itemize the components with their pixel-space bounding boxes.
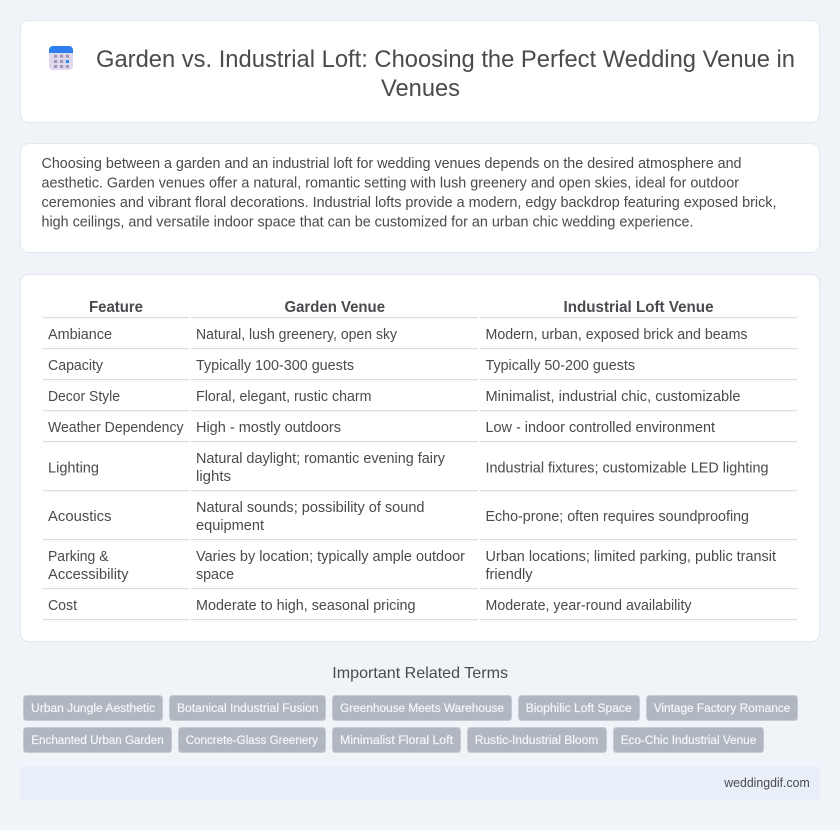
intro paragraph: high ceilings, and versatile indoor space that can be customized for an urban chic wedding experience.: [42, 214, 694, 230]
icon: calendar: [49, 46, 73, 70]
tag: botanical industrial fusion: Botanical Industrial Fusion: [177, 701, 319, 715]
tag: greenhouse meets warehouse: [332, 696, 512, 720]
intro paragraph: ceremonies and vibrant floral decorations. Industrial lofts provide a modern, edgy backdrop featuring exposed brick,: [42, 195, 776, 211]
footer: [20, 766, 820, 800]
row: decor style: Minimalist, industrial chic, customizable: [486, 389, 740, 405]
row: capacity: [43, 358, 797, 380]
table header row: Industrial Loft Venue: [564, 299, 714, 316]
tag: botanical industrial fusion: [170, 696, 326, 720]
row: lighting: [43, 451, 797, 491]
row: lighting: Industrial fixtures; customizable LED lighting: [486, 460, 768, 476]
tag: concrete-glass greenery: [178, 728, 326, 752]
row: parking and accessibility: Urban locations; limited parking, public transit: [486, 549, 776, 565]
row: parking and accessibility: space: [196, 567, 234, 583]
tag: rustic-industrial bloom: Rustic-Industrial Bloom: [475, 733, 598, 747]
intro paragraph: [42, 156, 776, 230]
tag: eco-chic industrial venue: [614, 728, 764, 752]
tag: minimalist floral loft: [332, 728, 460, 752]
row: lighting: Natural daylight; romantic evening fairy: [196, 451, 446, 467]
row: weather dependency: High - mostly outdoors: [196, 420, 341, 436]
row: parking and accessibility: friendly: [486, 567, 533, 583]
row: cost: Moderate, year-round availability: [486, 598, 692, 614]
tag: urban jungle aesthetic: [24, 696, 162, 720]
row: acoustics: equipment: [196, 518, 264, 534]
row: cost: Moderate to high, seasonal pricing: [196, 598, 416, 614]
tag: enchanted urban garden: Enchanted Urban Garden: [31, 733, 164, 747]
row: decor style: [43, 389, 797, 411]
row: acoustics: [43, 500, 797, 540]
row: capacity: Capacity: [48, 358, 104, 374]
row: parking and accessibility: Parking &: [48, 549, 109, 565]
panel: header: [20, 20, 820, 122]
tag: biophilic loft space: Biophilic Loft Space: [526, 701, 632, 715]
row: capacity: Typically 50-200 guests: [486, 358, 635, 374]
row: weather dependency: Low - indoor controlled environment: [486, 420, 715, 436]
tag: minimalist floral loft: Minimalist Floral Loft: [340, 733, 454, 747]
row: parking and accessibility: Varies by location; typically ample outdoor: [196, 549, 465, 565]
tag: enchanted urban garden: [24, 728, 172, 752]
table header row: Feature: [89, 299, 143, 316]
footer source: weddingdif.com: [723, 775, 810, 790]
table header row: [43, 299, 797, 318]
row: ambiance: Modern, urban, exposed brick and beams: [486, 327, 748, 343]
row: ambiance: Ambiance: [48, 327, 112, 343]
row: cost: Cost: [48, 598, 77, 614]
tag: biophilic loft space: [518, 696, 640, 720]
title: Garden vs. Industrial Loft: Choosing the Perfect Wedding Venue in: [96, 46, 795, 73]
tag: greenhouse meets warehouse: Greenhouse Meets Warehouse: [340, 701, 504, 715]
title: [96, 46, 795, 102]
row: weather dependency: Weather Dependency: [48, 420, 184, 436]
row: parking and accessibility: Accessibility: [48, 567, 129, 583]
tag: vintage factory romance: [646, 696, 798, 720]
panel: introduction: [20, 144, 820, 252]
row: capacity: Typically 100-300 guests: [196, 358, 354, 374]
row: lighting: Lighting: [48, 460, 99, 476]
row: decor style: Decor Style: [48, 389, 120, 405]
row: acoustics: Echo-prone; often requires soundproofing: [486, 509, 749, 525]
table header row: Garden Venue: [284, 299, 385, 316]
row: ambiance: Natural, lush greenery, open sky: [196, 327, 398, 343]
row: acoustics: Natural sounds; possibility of sound: [196, 500, 424, 516]
row: ambiance: [43, 327, 797, 349]
tag: eco-chic industrial venue: Eco-Chic Industrial Venue: [621, 733, 756, 747]
row: cost: [43, 598, 797, 620]
tag: concrete-glass greenery: Concrete-Glass Greenery: [186, 733, 319, 747]
title: Venues: [381, 75, 460, 102]
row: acoustics: Acoustics: [48, 509, 112, 525]
heading: important related terms: Important Related Terms: [332, 665, 508, 682]
tag list: related terms: [24, 696, 798, 752]
row: parking and accessibility: [43, 549, 797, 589]
row: weather dependency: [43, 420, 797, 442]
tag: vintage factory romance: Vintage Factory Romance: [654, 701, 790, 715]
tag: rustic-industrial bloom: [468, 728, 606, 752]
row: decor style: Floral, elegant, rustic charm: [196, 389, 372, 405]
tag: urban jungle aesthetic: Urban Jungle Aesthetic: [31, 701, 155, 715]
panel: comparison table: [20, 274, 820, 642]
intro paragraph: aesthetic. Garden venues offer a natural, romantic setting with lush greenery and open skies, ideal for outdoor: [42, 176, 739, 192]
intro paragraph: Choosing between a garden and an industrial loft for wedding venues depends on the desired atmosphere and: [42, 156, 742, 172]
row: lighting: lights: [196, 469, 231, 485]
